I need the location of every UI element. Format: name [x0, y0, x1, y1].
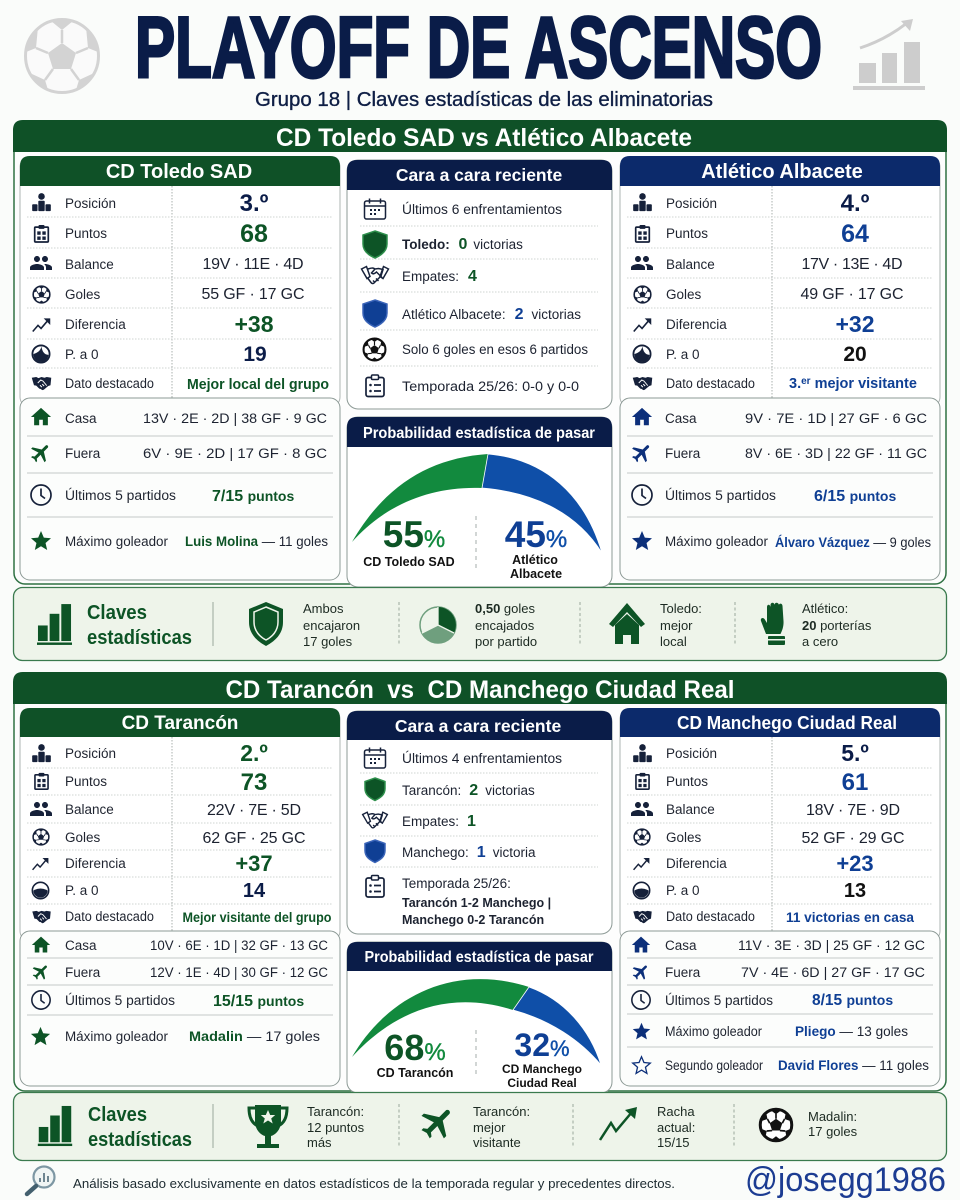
row: fuera: Fuera: [665, 446, 701, 461]
disclaimer: Análisis basado exclusivamente en datos estadísticos de la temporada regular y precedentes directos.: [73, 1176, 675, 1191]
row: goles: 49 GF · 17 GC: [800, 286, 904, 303]
row: diferencia: Diferencia: [65, 856, 126, 871]
gauge green segment: [352, 979, 529, 1057]
row: diferencia: Diferencia: [666, 317, 727, 332]
team name: Atlético Albacete: [701, 161, 863, 183]
row: fuera: [29, 960, 328, 983]
row: casa: Casa: [65, 938, 97, 953]
row: fuera: 7V · 4E · 6D | 27 GF · 17 GC: [741, 965, 925, 980]
row: diferencia: [634, 851, 874, 876]
key: plane: visitante: [473, 1135, 521, 1150]
row: diferencia: +38: [234, 311, 274, 337]
panel card: [20, 709, 340, 941]
row: balance: Balance: [65, 802, 114, 817]
row: dato destacado: Dato destacado: [65, 909, 154, 924]
row: fuera: 8V · 6E · 3D | 22 GF · 11 GC: [745, 446, 927, 461]
row: porterías a cero: [32, 880, 266, 902]
panel card: [620, 709, 940, 941]
row: goles: [364, 339, 588, 360]
dashed divider: [475, 1030, 477, 1078]
Manchego label: CD Manchego: [502, 1062, 582, 1076]
row: últimos 5 partidos: Últimos 5 partidos: [665, 993, 773, 1008]
row: balance: 19V · 11E · 4D: [202, 256, 304, 273]
strip background: [14, 1092, 946, 1160]
box: [620, 931, 940, 1086]
gauge: [352, 454, 602, 553]
row: diferencia: +32: [835, 311, 875, 337]
key: rising arrow: 15/15: [657, 1135, 690, 1150]
row: últimos 5 partidos: 7/15 puntos: [212, 488, 294, 505]
heading: estadísticas: [87, 627, 192, 649]
row: enfrentamientos: Últimos 4 enfrentamientos: [402, 751, 562, 766]
row: Albacete victorias: Atlético Albacete: 2 victorias: [402, 306, 581, 323]
row: dato destacado: [633, 376, 917, 392]
row: balance: [30, 256, 304, 273]
key: goalkeeper glove: Atlético:: [802, 601, 848, 616]
key: trophy: [249, 1104, 365, 1150]
team name: CD Manchego Ciudad Real: [677, 712, 897, 733]
row: puntos: [636, 220, 869, 248]
card: [347, 417, 612, 587]
row: empates: Empates: 4: [402, 268, 477, 285]
row: dato destacado: Dato destacado: [666, 376, 755, 391]
panel: Toledo home, away, form and scorer: [20, 398, 340, 580]
section 2 title: CD Tarancón vs CD Manchego Ciudad Real: [226, 676, 734, 704]
team header: [620, 156, 940, 186]
key: pie: encajados: [475, 618, 535, 633]
row: porterías a cero: 14: [243, 880, 266, 902]
row: dato destacado: 11 victorias en casa: [786, 909, 914, 925]
row: puntos: 64: [841, 220, 869, 248]
row: balance: [30, 802, 301, 819]
row: diferencia: Diferencia: [666, 856, 727, 871]
card: [347, 942, 612, 1093]
row: diferencia: +37: [235, 851, 273, 876]
row: últimos 5 partidos: Últimos 5 partidos: [65, 993, 175, 1008]
row: posición: [32, 740, 268, 766]
section 2: Tarancón vs Manchego: [13, 672, 947, 1093]
row: balance: 17V · 13E · 4D: [802, 256, 902, 273]
row: dato destacado: er: [801, 376, 811, 387]
key: pie: 0,50 goles: [475, 601, 535, 616]
key: plane: mejor: [473, 1120, 506, 1135]
key: house: mejor: [660, 618, 693, 633]
key: pie: [420, 601, 537, 649]
heading: estadísticas: [88, 1129, 192, 1151]
key: shield: [249, 601, 360, 649]
row: puntos: Puntos: [65, 226, 107, 241]
row: temporada: [366, 375, 579, 396]
Toledo label: CD Toledo SAD: [363, 555, 455, 569]
row: fuera: Fuera: [65, 446, 101, 461]
key: house: [609, 601, 702, 649]
row: diferencia: [33, 851, 273, 876]
row: dato destacado: [32, 376, 329, 393]
key: house: local: [660, 634, 687, 649]
key: shield: 17 goles: [303, 634, 353, 649]
row: fuera: [629, 960, 925, 983]
team header: [20, 156, 340, 186]
row: porterías a cero: [633, 343, 867, 366]
row: máximo goleador: Máximo goleador: [65, 1029, 168, 1044]
row: posición: 2.º: [240, 740, 268, 766]
row: máximo goleador: [633, 1023, 908, 1039]
row: dato destacado: Dato destacado: [666, 909, 755, 924]
row: Toledo victorias: [363, 231, 523, 258]
row: segundo goleador: [633, 1057, 929, 1073]
row: empates: Empates: 1: [402, 813, 476, 830]
row: Albacete victorias: [363, 300, 581, 327]
row: porterías a cero: P. a 0: [666, 883, 700, 898]
row: goles: [634, 286, 904, 303]
key: soccer ball: [760, 1109, 858, 1141]
row: dato destacado: [633, 909, 914, 925]
row: balance: [631, 256, 902, 273]
row: empates: [362, 266, 477, 285]
row: enfrentamientos: Últimos 6 enfrentamientos: [402, 202, 562, 217]
author handle: @josegg1986: [745, 1161, 946, 1199]
row: puntos: Puntos: [666, 226, 708, 241]
card: [347, 711, 612, 934]
row: goles: 55 GF · 17 GC: [202, 286, 304, 303]
Toledo percentage: 55%: [383, 514, 445, 555]
card: [347, 160, 612, 409]
icon: bars: [37, 604, 72, 645]
row: fuera: 12V · 1E · 4D | 30 GF · 12 GC: [150, 965, 328, 980]
row: puntos: 68: [240, 220, 268, 248]
row: goles: Solo 6 goles en esos 6 partidos: [402, 342, 588, 357]
row: diferencia: Diferencia: [65, 317, 126, 332]
row: balance: Balance: [65, 257, 114, 272]
section 1 panel background: [14, 121, 946, 584]
key: rising arrow: actual:: [657, 1120, 695, 1135]
row: diferencia: +23: [836, 851, 874, 876]
row: goles: [33, 829, 306, 847]
row: casa: Casa: [65, 411, 97, 426]
header text: Cara a cara reciente: [395, 716, 561, 736]
key: shield: Ambos: [303, 601, 344, 616]
icon: magnifier: [27, 1166, 54, 1194]
section 2 panel background: [14, 673, 946, 1091]
dashed divider: [475, 516, 477, 568]
row: casa: Casa: [665, 938, 697, 953]
team header: [620, 708, 940, 737]
row: casa: [632, 408, 927, 426]
row: segundo goleador: David Flores — 11 goles: [778, 1058, 929, 1073]
row: máximo goleador: [632, 531, 931, 550]
icon: bars: [38, 1106, 72, 1146]
header text: Probabilidad estadística de pasar: [363, 425, 595, 442]
row: máximo goleador: [31, 1027, 320, 1045]
row: posición: [32, 190, 269, 217]
header text: Probabilidad estadística de pasar: [364, 949, 594, 966]
row: balance: 22V · 7E · 5D: [207, 802, 301, 819]
row: enfrentamientos: [364, 748, 562, 768]
gauge blue segment: [482, 454, 602, 553]
row: puntos: [35, 220, 268, 248]
row: porterías a cero: P. a 0: [65, 883, 99, 898]
row: últimos 5 partidos: [32, 991, 304, 1010]
row: últimos 5 partidos: Últimos 5 partidos: [665, 488, 776, 503]
panel: CD Tarancón stats: [20, 708, 340, 941]
row: casa: [31, 408, 327, 426]
row: últimos 5 partidos: [632, 485, 896, 505]
row: casa: [32, 937, 328, 953]
team header: [20, 708, 340, 737]
row: temporada: Tarancón 1-2 Manchego |: [402, 896, 551, 910]
panel: probabilidad estadística: [347, 942, 612, 1093]
row: últimos 5 partidos: [632, 991, 893, 1009]
row: goles: Goles: [666, 830, 702, 845]
row: dato destacado: Mejor local del grupo: [187, 376, 329, 393]
Manchego label: Ciudad Real: [507, 1076, 577, 1090]
row: dato destacado: [32, 909, 332, 925]
row: posición: 3.º: [240, 190, 269, 217]
row: casa: 10V · 6E · 1D | 32 GF · 13 GC: [150, 938, 328, 953]
Albacete percentage: 45%: [505, 514, 567, 555]
row: posición: 4.º: [841, 190, 870, 217]
key: trophy: 12 puntos: [307, 1120, 365, 1135]
Albacete label: Atlético: [512, 553, 558, 567]
row: máximo goleador: Máximo goleador: [65, 534, 168, 549]
row: posición: Posición: [65, 746, 116, 761]
row: porterías a cero: [32, 343, 267, 366]
row: porterías a cero: 20: [843, 343, 867, 366]
header text: Cara a cara reciente: [396, 165, 562, 185]
row: últimos 5 partidos: Últimos 5 partidos: [65, 488, 176, 503]
section 1: Toledo vs Albacete: [13, 120, 947, 587]
panel: probabilidad estadística: [347, 417, 612, 587]
row: máximo goleador: [31, 531, 328, 550]
row: puntos: [636, 769, 868, 796]
row: casa: Casa: [665, 411, 697, 426]
row: temporada: Manchego 0-2 Tarancón: [402, 913, 544, 927]
Tarancón percentage: 68%: [384, 1027, 446, 1068]
row: temporada: Temporada 25/26:: [402, 876, 511, 891]
row: posición: Posición: [65, 196, 116, 211]
row: porterías a cero: 13: [844, 880, 866, 902]
row: empates: [363, 812, 476, 830]
icon: rising bar chart watermark: [853, 19, 925, 90]
team name: CD Toledo SAD: [106, 161, 252, 183]
row: posición: [633, 190, 870, 217]
header: [347, 711, 612, 740]
box: [20, 398, 340, 580]
row: casa: [632, 937, 925, 953]
team name: CD Tarancón: [122, 713, 238, 734]
row: puntos: 61: [842, 769, 868, 796]
key: plane: Tarancón:: [473, 1104, 530, 1119]
heading: Claves: [87, 602, 147, 624]
row: goles: Goles: [65, 287, 101, 302]
row: segundo goleador: Segundo goleador: [665, 1058, 763, 1073]
header: [347, 417, 612, 447]
heading: Claves: [88, 1104, 147, 1126]
row: Manchego victorias: Manchego: 1 victoria: [402, 844, 536, 861]
row: fuera: 6V · 9E · 2D | 17 GF · 8 GC: [143, 446, 327, 461]
panel card: [20, 157, 340, 407]
key: pie: por partido: [475, 634, 537, 649]
panel: CD Toledo SAD stats: [20, 156, 340, 407]
row: últimos 5 partidos: 6/15 puntos: [814, 488, 896, 505]
row: casa: 11V · 3E · 3D | 25 GF · 12 GC: [738, 938, 925, 953]
panel: Manchego home, away, form and scorers: [620, 931, 940, 1086]
row: goles: 62 GF · 25 GC: [202, 830, 306, 847]
row: diferencia: [33, 311, 274, 337]
row: posición: 5.º: [841, 740, 869, 766]
key: soccer ball: 17 goles: [808, 1124, 858, 1139]
row: goles: [33, 286, 304, 303]
panel: Atlético Albacete stats: [620, 156, 940, 407]
key: plane: [414, 1099, 530, 1150]
key: rising arrow: [600, 1104, 695, 1150]
gauge blue segment: [513, 987, 601, 1065]
row: dato destacado: 3.: [789, 376, 801, 392]
key: goalkeeper glove: [761, 601, 872, 649]
row: fuera: [628, 439, 927, 466]
row: puntos: Puntos: [666, 774, 708, 789]
row: balance: 18V · 7E · 9D: [806, 802, 900, 819]
row: Tarancón victorias: Tarancón: 2 victorias: [402, 782, 535, 799]
key: shield: encajaron: [303, 618, 360, 633]
row: goles: [634, 829, 904, 847]
panel: Tarancón home, away, form and scorer: [20, 931, 340, 1086]
row: Tarancón victorias: [365, 778, 535, 800]
row: máximo goleador: Luis Molina — 11 goles: [185, 534, 328, 549]
footer: [27, 1161, 946, 1199]
panel: cara a cara reciente: [347, 711, 612, 934]
row: temporada: Temporada 25/26: 0-0 y 0-0: [402, 379, 579, 394]
row: puntos: Puntos: [65, 774, 107, 789]
strip background: [14, 588, 946, 660]
key: trophy: más: [307, 1135, 332, 1150]
Albacete label: Albacete: [510, 567, 562, 581]
row: goles: Goles: [65, 830, 101, 845]
key: goalkeeper glove: a cero: [802, 634, 838, 649]
row: goles: 52 GF · 29 GC: [802, 830, 904, 847]
section 2 header band: [13, 672, 947, 704]
gauge: [352, 979, 601, 1065]
key: goalkeeper glove: 20 porterías: [802, 618, 871, 633]
section 1 header band: [13, 120, 947, 152]
row: diferencia: [634, 311, 875, 337]
row: Manchego victorias: [365, 840, 536, 862]
row: porterías a cero: P. a 0: [666, 347, 700, 362]
row: goles: Goles: [666, 287, 702, 302]
row: dato destacado: Dato destacado: [65, 376, 154, 391]
box: [620, 398, 940, 580]
row: enfrentamientos: [364, 198, 562, 219]
row: porterías a cero: P. a 0: [65, 347, 99, 362]
header: [347, 160, 612, 190]
row: máximo goleador: Álvaro Vázquez — 9 goles: [775, 535, 931, 550]
row: balance: [631, 802, 900, 819]
Tarancón label: CD Tarancón: [377, 1066, 453, 1080]
claves estadísticas 1: [14, 588, 946, 660]
row: dato destacado: Mejor visitante del grupo: [182, 909, 332, 925]
row: casa: 13V · 2E · 2D | 38 GF · 9 GC: [143, 411, 327, 426]
section 1 title: CD Toledo SAD vs Atlético Albacete: [276, 124, 692, 152]
row: máximo goleador: Pliego — 13 goles: [795, 1024, 908, 1039]
box: [20, 931, 340, 1086]
row: puntos: 73: [241, 769, 267, 796]
row: últimos 5 partidos: 15/15 puntos: [213, 993, 304, 1010]
key: house: Toledo:: [660, 601, 702, 616]
panel card: [620, 157, 940, 407]
key: soccer ball: Madalin:: [808, 1109, 857, 1124]
gauge green segment: [352, 454, 488, 542]
row: porterías a cero: [633, 880, 866, 902]
row: dato destacado: mejor visitante: [811, 376, 917, 392]
key: trophy: Tarancón:: [307, 1104, 364, 1119]
row: fuera: Fuera: [665, 965, 701, 980]
Manchego percentage: 32%: [514, 1027, 570, 1063]
row: fuera: [27, 439, 327, 466]
row: temporada: [366, 876, 551, 927]
row: balance: Balance: [666, 802, 715, 817]
header: [347, 942, 612, 971]
row: fuera: Fuera: [65, 965, 101, 980]
icon: soccer ball watermark: [26, 20, 98, 92]
row: balance: Balance: [666, 257, 715, 272]
row: posición: Posición: [666, 196, 717, 211]
row: últimos 5 partidos: 8/15 puntos: [812, 992, 893, 1009]
row: máximo goleador: Madalin — 17 goles: [189, 1029, 320, 1044]
panel: CD Manchego Ciudad Real stats: [620, 708, 940, 941]
key: rising arrow: Racha: [657, 1104, 695, 1119]
row: Toledo victorias: Toledo: 0 victorias: [402, 236, 523, 253]
row: posición: [633, 740, 869, 766]
row: puntos: [35, 769, 267, 796]
panel: cara a cara reciente: [347, 160, 612, 409]
row: porterías a cero: 19: [243, 343, 267, 366]
claves estadísticas 2: [14, 1092, 946, 1160]
row: posición: Posición: [666, 746, 717, 761]
subtitle: Grupo 18 | Claves estadísticas de las eliminatorias: [255, 89, 713, 111]
row: máximo goleador: Máximo goleador: [665, 1024, 762, 1039]
row: máximo goleador: Máximo goleador: [665, 534, 768, 549]
panel: Albacete home, away, form and scorer: [620, 398, 940, 580]
row: casa: 9V · 7E · 1D | 27 GF · 6 GC: [745, 411, 927, 426]
row: últimos 5 partidos: [31, 485, 294, 505]
